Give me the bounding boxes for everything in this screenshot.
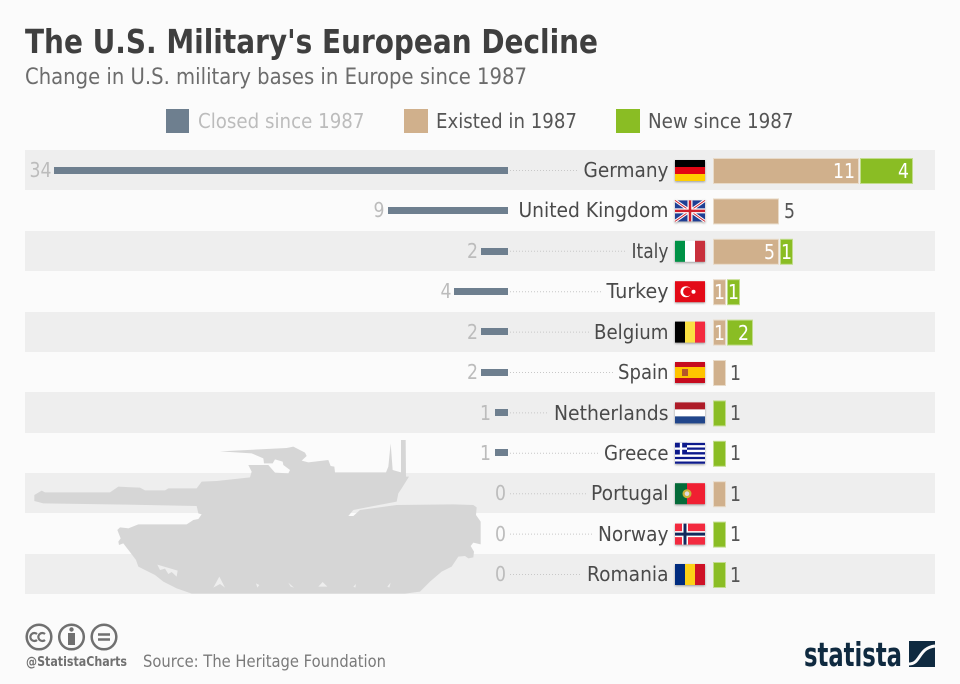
row: Norway bbox=[495, 522, 741, 547]
row: Belgium: Belgium bbox=[594, 320, 668, 344]
row: United Kingdom: 5 bbox=[784, 199, 795, 223]
legend: Closed since 1987 bbox=[198, 109, 364, 133]
icon: flag Portugal bbox=[675, 483, 705, 504]
row: United Kingdom bbox=[374, 198, 795, 224]
row: Germany: Germany bbox=[584, 158, 669, 182]
row: Italy: Italy bbox=[632, 239, 669, 263]
icon: flag Belgium bbox=[675, 322, 705, 343]
row: Germany: 11 bbox=[833, 159, 855, 183]
row: Norway: 1 bbox=[730, 522, 741, 546]
row bands bbox=[25, 150, 935, 594]
row: Portugal: Portugal bbox=[591, 481, 668, 505]
icon: flag Romania bbox=[675, 564, 705, 585]
row: Portugal: 0 bbox=[495, 481, 506, 505]
row: Belgium: 2 bbox=[467, 320, 478, 344]
row: Belgium: 2 bbox=[738, 321, 749, 345]
row: Spain: Spain bbox=[618, 360, 668, 384]
row: Romania: Romania bbox=[587, 562, 668, 586]
logo: statista: statista bbox=[804, 635, 902, 674]
row: Germany: 4 bbox=[898, 159, 909, 183]
row: Netherlands: 1 bbox=[480, 401, 491, 425]
icon: flag United Kingdom bbox=[675, 200, 705, 221]
row: Netherlands bbox=[480, 401, 741, 426]
row: Romania: 0 bbox=[495, 562, 506, 586]
handle: @StatistaCharts bbox=[26, 655, 127, 670]
icon: flag Italy bbox=[675, 241, 705, 262]
icon: flag Turkey bbox=[675, 281, 705, 302]
row: Netherlands: 1 bbox=[730, 401, 741, 425]
row: Belgium: 1 bbox=[714, 321, 725, 345]
icon: flag Spain bbox=[675, 362, 705, 383]
title: The U.S. Military's European Decline bbox=[25, 22, 598, 61]
row: Portugal bbox=[495, 481, 741, 507]
row: Turkey: 1 bbox=[728, 280, 739, 304]
row: Germany: 34 bbox=[30, 158, 52, 182]
icon: tank silhouette bbox=[34, 440, 481, 594]
row: Italy bbox=[467, 239, 792, 264]
row: Turkey: Turkey bbox=[606, 279, 669, 303]
row: Turkey: 4 bbox=[440, 279, 452, 303]
row: Portugal: 1 bbox=[730, 482, 741, 506]
legend bbox=[166, 109, 794, 133]
icon: flag Germany bbox=[675, 160, 705, 181]
row: Greece: 1 bbox=[480, 441, 491, 465]
icon: creative commons licence badges bbox=[27, 625, 116, 649]
row: Turkey bbox=[440, 279, 740, 305]
icon: flag Norway bbox=[675, 524, 705, 545]
row: Turkey: 1 bbox=[714, 280, 725, 304]
icon: flag Greece bbox=[675, 443, 705, 464]
row: Italy: 2 bbox=[467, 239, 478, 263]
row: Greece: 1 bbox=[730, 441, 741, 465]
row: Romania: 1 bbox=[730, 563, 741, 587]
row: United Kingdom: 9 bbox=[374, 198, 384, 222]
source: Source: The Heritage Foundation bbox=[143, 652, 386, 671]
row: Spain bbox=[467, 360, 741, 386]
row: Spain: 2 bbox=[467, 360, 478, 384]
row: Greece: Greece bbox=[604, 441, 668, 465]
legend: New since 1987 bbox=[648, 109, 794, 133]
row: Italy: 5 bbox=[764, 240, 775, 264]
row: Belgium bbox=[467, 320, 752, 345]
row: Romania bbox=[495, 562, 741, 588]
row: Norway: 0 bbox=[495, 522, 506, 546]
row: Netherlands: Netherlands bbox=[554, 401, 668, 425]
subtitle: Change in U.S. military bases in Europe since 1987 bbox=[25, 65, 527, 90]
row: United Kingdom: United Kingdom bbox=[518, 198, 668, 222]
row: Germany bbox=[30, 158, 912, 184]
row: Italy: 1 bbox=[781, 240, 792, 264]
legend: Existed in 1987 bbox=[436, 109, 577, 133]
icon: flag Netherlands bbox=[675, 402, 705, 423]
row: Greece bbox=[480, 441, 741, 466]
row: Spain: 1 bbox=[730, 361, 741, 385]
row: Norway: Norway bbox=[598, 522, 669, 546]
